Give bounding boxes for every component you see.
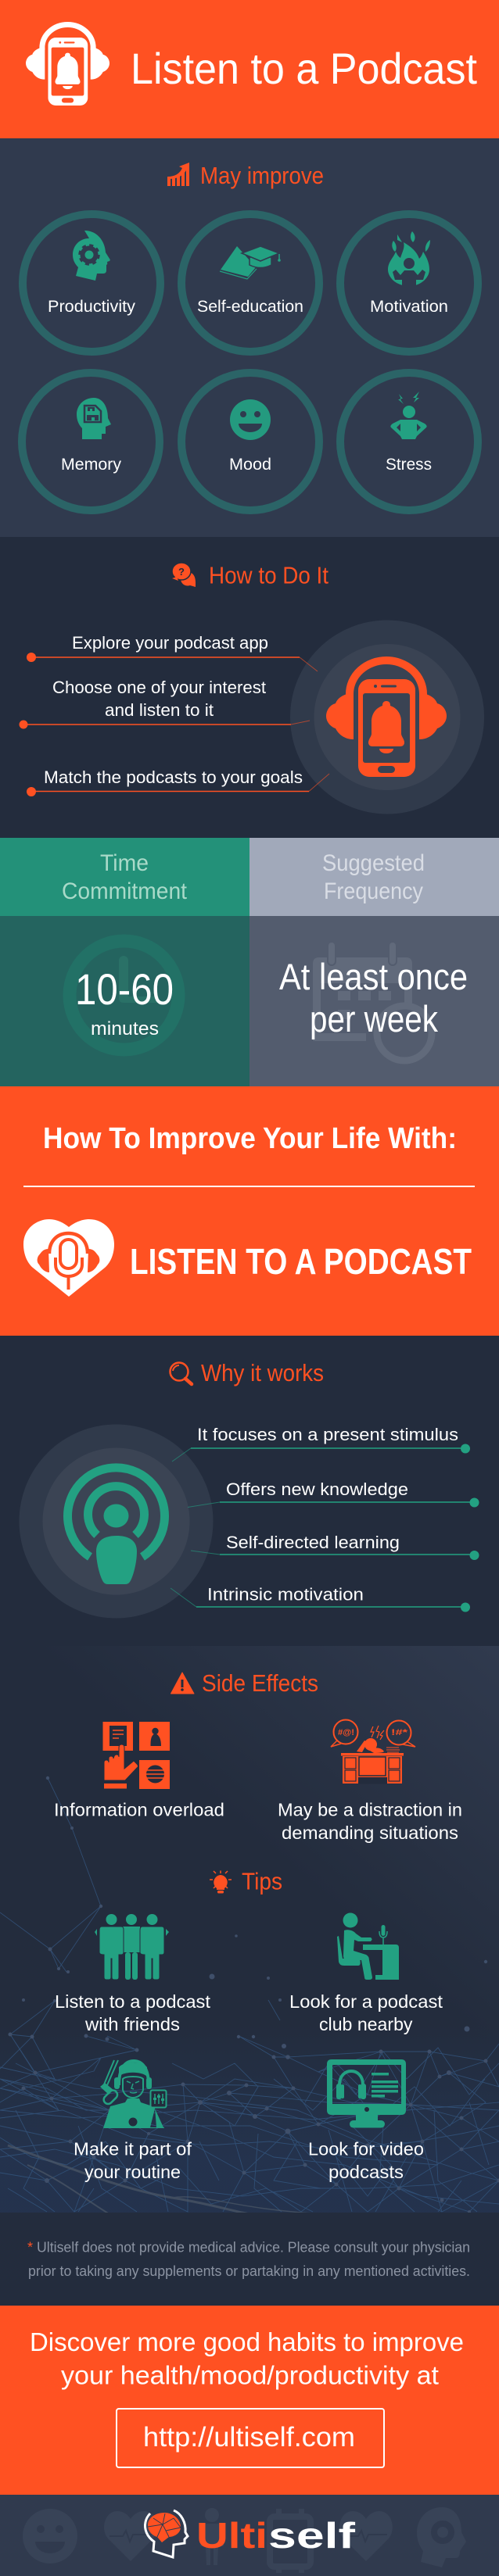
title: Listen to a Podcast: [131, 44, 477, 93]
heading: time commitment: [62, 850, 188, 904]
text: podcast club: Look for a podcast: [289, 1991, 443, 2012]
panel: side effects and tips: [0, 1646, 499, 2214]
step 1: [27, 633, 318, 671]
icon: faded calendar: [313, 942, 432, 1061]
value: at least once per week: per week: [310, 998, 438, 1039]
disclaimer text: prior to taking any supplements or partaking in any mentioned activities.: [28, 2263, 470, 2279]
item: productivity: Productivity: [48, 298, 136, 316]
logo: ultiself: Ulti: [196, 2515, 267, 2556]
text: routine: your routine: [84, 2162, 181, 2182]
network background: [0, 1776, 499, 2214]
reason 2: [188, 1479, 479, 1507]
reason 3: [191, 1533, 479, 1560]
call to action text: Discover more good habits to improve: [30, 2327, 464, 2356]
value: at least once per week: [279, 956, 468, 1039]
panel: time commitment: [0, 838, 250, 1086]
item: stress: Stress: [386, 456, 432, 474]
reason 3: Self-directed learning: [226, 1533, 400, 1552]
text: video podcasts: podcasts: [328, 2162, 404, 2182]
value: 10-60 minutes: [75, 964, 174, 1039]
panel: header: [0, 0, 499, 138]
icon: stressed at desk: !#*: [391, 1728, 408, 1737]
disclaimer text: Ultiself does not provide medical advice. Please consult your physician: [37, 2240, 470, 2256]
icon: growth chart: [167, 163, 189, 186]
reason 1: It focuses on a present stimulus: [197, 1425, 458, 1444]
icon: monitor with headphones: [327, 2059, 406, 2127]
text: routine: [74, 2138, 192, 2182]
heading: why it works: Why it works: [201, 1359, 324, 1386]
heading: suggested frequency: [322, 850, 425, 904]
call to action text: [30, 2327, 464, 2390]
text: video podcasts: Look for video: [308, 2138, 424, 2159]
item: mood: Mood: [229, 456, 271, 474]
heading: suggested frequency: Suggested: [322, 850, 425, 876]
step 3: Match the podcasts to your goals: [44, 767, 303, 787]
url button: [117, 2409, 384, 2467]
text: distraction: demanding situations: [282, 1823, 458, 1843]
panel: suggested frequency: [250, 838, 499, 1086]
step 1: Explore your podcast app: [72, 633, 268, 653]
item: motivation: Motivation: [370, 298, 448, 316]
icon: question chat bubbles: [172, 563, 196, 587]
value: 10-60 minutes: minutes: [91, 1018, 159, 1039]
icon: question chat bubbles: ?: [178, 566, 185, 578]
text: podcast club: club nearby: [319, 2014, 413, 2034]
icon: magnifier: [171, 1363, 192, 1384]
panel: improve your life banner: [0, 1086, 499, 1336]
panel: may improve: [0, 138, 499, 537]
heading: side effects: Side Effects: [202, 1669, 318, 1697]
icon: person at podcast desk: [337, 1913, 399, 1980]
text: routine: Make it part of: [74, 2138, 192, 2159]
item: stress: [340, 373, 478, 510]
text: distraction: [278, 1799, 462, 1843]
logo: ultiself: self: [268, 2515, 356, 2556]
icon: information overload: [103, 1722, 170, 1789]
banner heading: How To Improve Your Life With:: [43, 1122, 457, 1155]
icon: faded clock: [70, 941, 178, 1050]
reason 4: Intrinsic motivation: [207, 1585, 364, 1604]
text: podcast club: [289, 1991, 443, 2034]
disclaimer text: [27, 2240, 470, 2279]
url button: http://ultiself.com: [143, 2422, 355, 2453]
heading: tips: Tips: [242, 1868, 282, 1894]
panel: why it works: [0, 1336, 499, 1646]
icon: phone with headphones: [26, 24, 109, 106]
step 2: and listen to it: [105, 700, 214, 720]
reason 1: [172, 1425, 470, 1462]
item: self-education: Self-education: [197, 298, 303, 316]
heading: time commitment: Commitment: [62, 878, 188, 904]
logo: ultiself: [145, 2510, 356, 2557]
text: distraction: May be a distraction in: [278, 1799, 462, 1819]
item: self-education: [181, 214, 319, 352]
step 3: [27, 767, 329, 796]
icon: heart with microphone: [23, 1219, 114, 1297]
value: at least once per week: At least once: [279, 956, 468, 997]
reason 4: [171, 1585, 470, 1612]
text: video podcasts: [308, 2138, 424, 2182]
icon: three friends: [95, 1914, 169, 1980]
icon: stressed at desk: #@!: [338, 1728, 354, 1737]
reason 2: Offers new knowledge: [226, 1479, 408, 1499]
item: memory: Memory: [61, 456, 122, 474]
value: 10-60 minutes: 10-60: [75, 964, 174, 1014]
panel: call to action: [0, 2306, 499, 2495]
text: with friends: [55, 1991, 211, 2034]
panel: how to do it: [0, 537, 499, 838]
item: mood: [181, 373, 319, 510]
heading: time commitment: Time: [100, 850, 149, 876]
faded footer icons: [23, 2507, 466, 2573]
panel: disclaimer: [0, 2213, 499, 2306]
call to action text: your health/mood/productivity at: [61, 2360, 439, 2390]
icon: podcaster with headset: [100, 2060, 166, 2128]
heading: may improve: May improve: [200, 162, 324, 189]
icon: light bulb: [210, 1871, 232, 1893]
text: with friends: with friends: [84, 2014, 180, 2034]
item: productivity: [23, 214, 160, 352]
illustration: phone with headphones in circles: [290, 621, 484, 814]
step 2: Choose one of your interest: [52, 678, 266, 697]
icon: stressed at desk: [331, 1719, 415, 1784]
item: motivation: [340, 214, 478, 352]
heading: suggested frequency: Frequency: [324, 878, 423, 904]
icon: warning triangle: [171, 1673, 194, 1694]
illustration: podcast symbol in circles: [19, 1424, 213, 1618]
text: with friends: Listen to a podcast: [55, 1991, 211, 2012]
panel: footer: [0, 2495, 499, 2576]
text: information overload: Information overload: [54, 1799, 224, 1819]
step 2: [19, 678, 310, 728]
item: memory: [22, 373, 160, 510]
disclaimer text: *: [27, 2240, 33, 2256]
heading: how to do it: How to Do It: [209, 561, 328, 589]
